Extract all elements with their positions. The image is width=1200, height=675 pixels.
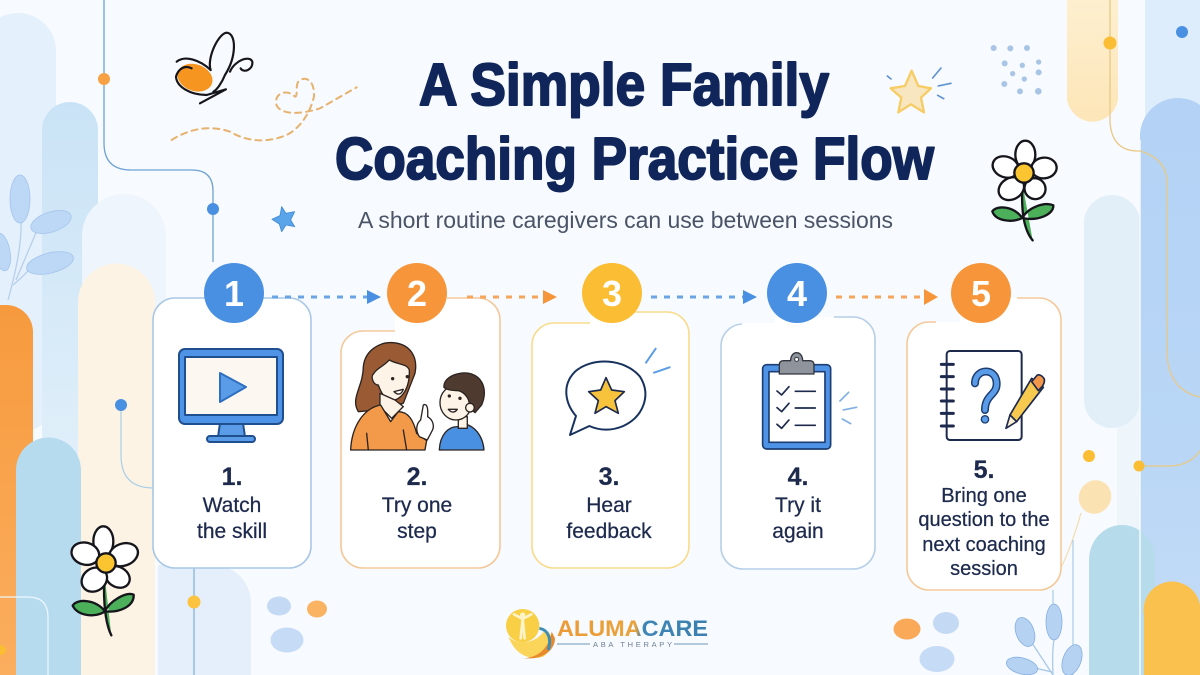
text: step 4: Try it [775, 494, 821, 517]
icon: notebook with question mark and pencil [941, 351, 1044, 440]
text: step 2: 2. [407, 463, 427, 491]
title: Coaching Practice Flow [335, 126, 934, 192]
text: step 3: 3. [599, 463, 619, 491]
icon: flower bottom left [69, 526, 141, 635]
step number badge 5 [951, 263, 1011, 323]
icon: butterfly [174, 33, 252, 103]
icon: flower top right [990, 141, 1058, 240]
right leaf sprig [1004, 604, 1086, 675]
step number badge 2 [387, 263, 447, 323]
panel: step 1 watch the skill [153, 298, 311, 568]
step number badge 4 [767, 263, 827, 323]
text: step 2: step [397, 520, 437, 543]
step number badge 5: 5 [971, 273, 991, 314]
step number badge 1: 1 [224, 273, 244, 314]
logo tagline: ABA THERAPY [593, 640, 672, 649]
step number badge 2: 2 [407, 273, 427, 314]
panel: step 2 try one step [341, 298, 500, 568]
subtitle: A short routine caregivers can use between sessions [358, 207, 893, 233]
text: step 4: again [772, 520, 824, 543]
text: step 3: Hear [586, 494, 632, 517]
arrow: step 3 to 4 [651, 290, 757, 304]
panel: step 3 hear feedback [532, 312, 689, 568]
blobs bottom left [267, 596, 327, 652]
text: step 1: the skill [197, 520, 267, 543]
arrow: step 4 to 5 [836, 289, 938, 305]
step number badge 1 [204, 263, 264, 323]
step number badge 3: 3 [602, 273, 622, 314]
text: step 5: session [950, 558, 1018, 580]
logo: AlumaCare ABA Therapy [506, 609, 708, 658]
logo wordmark: ALUMACARE [557, 616, 708, 641]
icon: blue star [272, 207, 295, 232]
step number badge 3 [582, 263, 642, 323]
left leaf sprig [0, 175, 76, 300]
dashed flight path with heart [172, 79, 357, 140]
text: step 4 [772, 463, 824, 543]
panel: step 5 bring one question [907, 298, 1061, 590]
text: step 1: Watch [203, 494, 261, 517]
illustration: caregiver and child [351, 343, 484, 450]
right background shapes [1067, 0, 1200, 675]
text: step 3 [566, 463, 652, 543]
panel: step 4 try it again [721, 317, 875, 569]
arrow: step 1 to 2 [272, 290, 381, 304]
text: step 1 [197, 463, 267, 543]
blobs bottom right [894, 612, 959, 672]
text: step 5: question to the [918, 509, 1050, 531]
left background shapes [0, 13, 251, 675]
text: step 5: Bring one [941, 485, 1027, 507]
logo mark [506, 609, 555, 658]
text: step 4: 4. [788, 463, 808, 491]
icon: clipboard checklist [763, 353, 857, 449]
title [335, 52, 934, 192]
step number badge 4: 4 [787, 273, 807, 314]
icon: video monitor [179, 349, 283, 442]
text: step 2: Try one [382, 494, 452, 517]
text: step 3: feedback [566, 520, 652, 543]
icon: yellow star with sparks [887, 68, 951, 112]
text: step 2 [382, 463, 452, 543]
dot cluster [991, 45, 1042, 95]
text: step 5: next coaching [922, 534, 1046, 556]
arrow: step 2 to 3 [467, 290, 557, 304]
title: A Simple Family [419, 52, 829, 118]
text: step 5 [918, 456, 1050, 580]
text: step 1: 1. [222, 463, 242, 491]
text: step 5: 5. [974, 456, 994, 484]
icon: speech bubble with star [566, 349, 670, 435]
